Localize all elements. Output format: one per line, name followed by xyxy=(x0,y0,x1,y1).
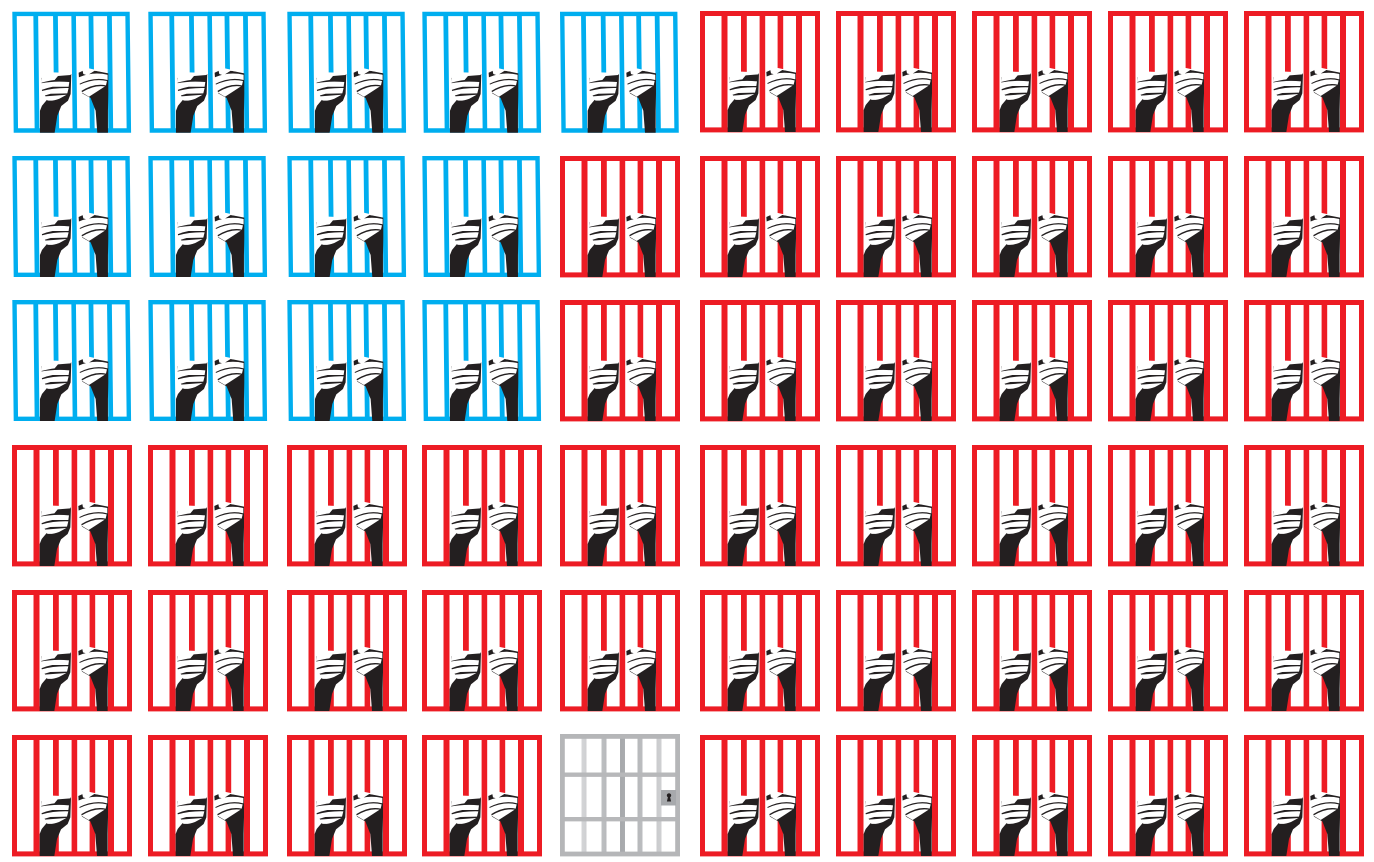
red cell 17 xyxy=(838,158,954,277)
red cell 34 xyxy=(424,447,540,566)
red cell 50 xyxy=(1246,592,1362,711)
red cell 19 xyxy=(1110,158,1226,277)
red cell 45 xyxy=(562,592,678,711)
red cell 46 xyxy=(702,592,818,711)
red cell 43 xyxy=(290,592,404,711)
blue cell 23 xyxy=(290,302,404,421)
row 4: ten red cells xyxy=(14,447,1362,566)
red cell 6 xyxy=(702,13,818,132)
blue cell 5 xyxy=(562,14,677,133)
red cell 28 xyxy=(974,302,1090,421)
red cell 58 xyxy=(974,737,1090,856)
red cell 27 xyxy=(838,302,954,421)
blue cell 4 xyxy=(425,14,539,133)
red cell 9 xyxy=(1110,13,1226,132)
red cell 49 xyxy=(1110,592,1226,711)
red cell 30 xyxy=(1246,302,1362,421)
red cell 57 xyxy=(838,737,954,856)
red cell 47 xyxy=(838,592,954,711)
red cell 36 xyxy=(702,447,818,566)
red cell 39 xyxy=(1110,447,1226,566)
red cell 37 xyxy=(838,447,954,566)
blue cell 13 xyxy=(290,158,404,277)
red cell 7 xyxy=(838,13,954,132)
blue cell 11 xyxy=(15,158,129,277)
red cell 16 xyxy=(702,158,818,277)
red cell 38 xyxy=(974,447,1090,566)
red cell 44 xyxy=(424,592,540,711)
red cell 31 xyxy=(14,447,130,566)
red cell 40 xyxy=(1246,447,1362,566)
red cell 51 xyxy=(14,737,130,856)
red cell 52 xyxy=(150,737,266,856)
red cell 59 xyxy=(1110,737,1226,856)
red cell 54 xyxy=(424,737,540,856)
row 3: four blue cells and six red cells xyxy=(15,302,1362,421)
blue cell 14 xyxy=(425,158,539,277)
red cell 26 xyxy=(702,302,818,421)
red cell 53 xyxy=(290,737,404,856)
blue cell 2 xyxy=(151,14,265,133)
blue cell 24 xyxy=(425,302,539,421)
blue cell 3 xyxy=(290,14,404,133)
red cell 41 xyxy=(14,592,130,711)
red cell 18 xyxy=(974,158,1090,277)
red cell 32 xyxy=(150,447,266,566)
red cell 25 xyxy=(562,302,678,421)
row 6: nine red cells and one open grey door xyxy=(14,736,1362,856)
red cell 20 xyxy=(1246,158,1362,277)
red cell 10 xyxy=(1246,13,1362,132)
red cell 60 xyxy=(1246,737,1362,856)
red cell 8 xyxy=(974,13,1090,132)
red cell 35 xyxy=(562,447,678,566)
row 2: four blue cells and six red cells xyxy=(15,158,1362,277)
blue cell 22 xyxy=(151,302,265,421)
red cell 33 xyxy=(290,447,404,566)
red cell 48 xyxy=(974,592,1090,711)
red cell 56 xyxy=(702,737,818,856)
red cell 42 xyxy=(150,592,266,711)
blue cell 1 xyxy=(15,14,129,133)
empty grey prison door with keyhole, cell 55 xyxy=(562,736,678,854)
blue cell 21 xyxy=(15,302,129,421)
blue cell 12 xyxy=(151,158,265,277)
red cell 29 xyxy=(1110,302,1226,421)
row 1: five blue cells and five red cells xyxy=(15,13,1362,133)
row 5: ten red cells xyxy=(14,592,1362,711)
red cell 15 xyxy=(562,158,678,277)
